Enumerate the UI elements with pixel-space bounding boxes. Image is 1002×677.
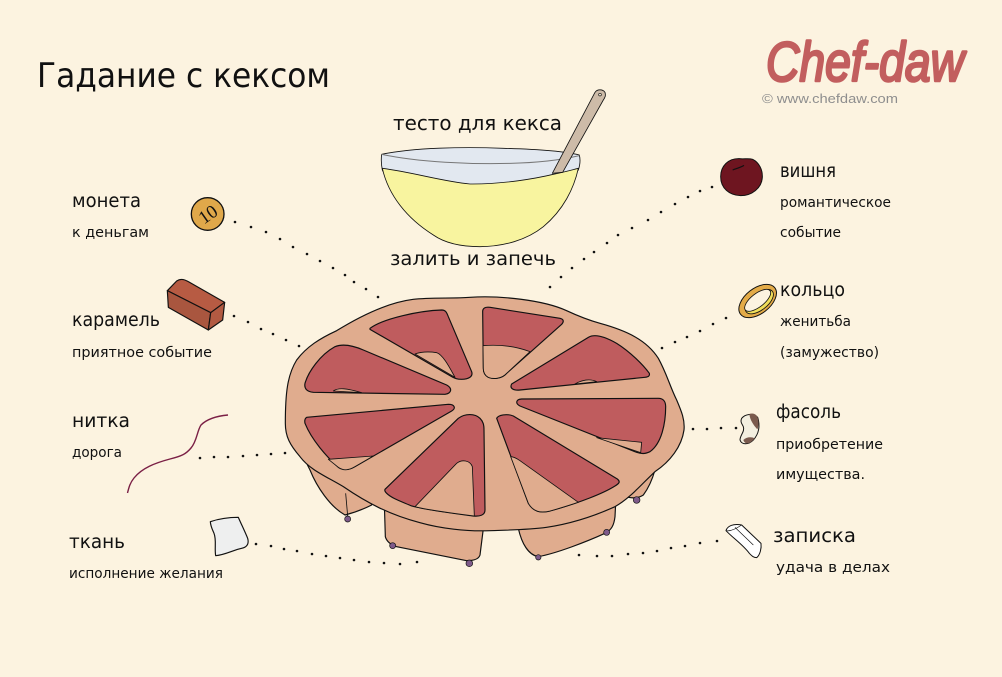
label: кольцо <box>780 278 845 301</box>
title: Гадание с кексом <box>37 56 330 96</box>
dotted connectors <box>199 186 737 565</box>
meaning: дорога <box>72 445 122 461</box>
icon: ring <box>733 278 783 324</box>
item: bean <box>740 400 883 483</box>
logo: © www.chefdaw.com <box>762 91 898 106</box>
label: ткань <box>69 530 125 553</box>
icon: bean <box>740 413 759 444</box>
item: caramel <box>72 279 225 361</box>
icon: cherry <box>721 159 762 196</box>
item: cloth <box>69 517 248 582</box>
item: ring <box>733 278 879 361</box>
label: записка <box>773 524 856 547</box>
cake mold <box>285 297 684 567</box>
icon: rolled note <box>726 524 761 558</box>
mold top <box>285 297 684 531</box>
meaning: исполнение желания <box>69 566 223 582</box>
heading: pour and bake: залить и запечь <box>390 248 556 270</box>
label: фасоль <box>776 400 841 423</box>
item: note <box>726 524 890 576</box>
icon: cloth <box>210 517 248 556</box>
meaning: к деньгам <box>72 225 149 241</box>
icon: coin: 10 <box>195 201 222 229</box>
icon: thread <box>128 415 228 493</box>
heading: batter: тесто для кекса <box>393 111 562 135</box>
label: карамель <box>72 308 160 331</box>
item: coin <box>72 189 224 241</box>
mold slot bottoms <box>328 345 642 516</box>
mold feet <box>345 497 640 567</box>
label: монета <box>72 189 141 212</box>
item: cherry: событие <box>780 225 841 241</box>
item: ring: (замужество) <box>780 345 879 361</box>
logo: Chef-daw <box>766 30 967 93</box>
meaning: удача в делах <box>776 560 890 576</box>
mold slots <box>305 307 666 516</box>
meaning: романтическое <box>780 195 891 211</box>
mold legs <box>307 463 655 561</box>
meaning: приятное событие <box>72 345 212 361</box>
meaning: женитьба <box>780 314 851 330</box>
item: bean: имущества. <box>776 467 865 483</box>
icon: caramel block <box>167 279 225 330</box>
label: нитка <box>72 409 130 432</box>
label: вишня <box>780 159 836 182</box>
item: thread <box>72 409 228 493</box>
item: cherry <box>721 159 891 241</box>
icon: mixing bowl with spoon <box>381 90 605 247</box>
meaning: приобретение <box>776 437 883 453</box>
